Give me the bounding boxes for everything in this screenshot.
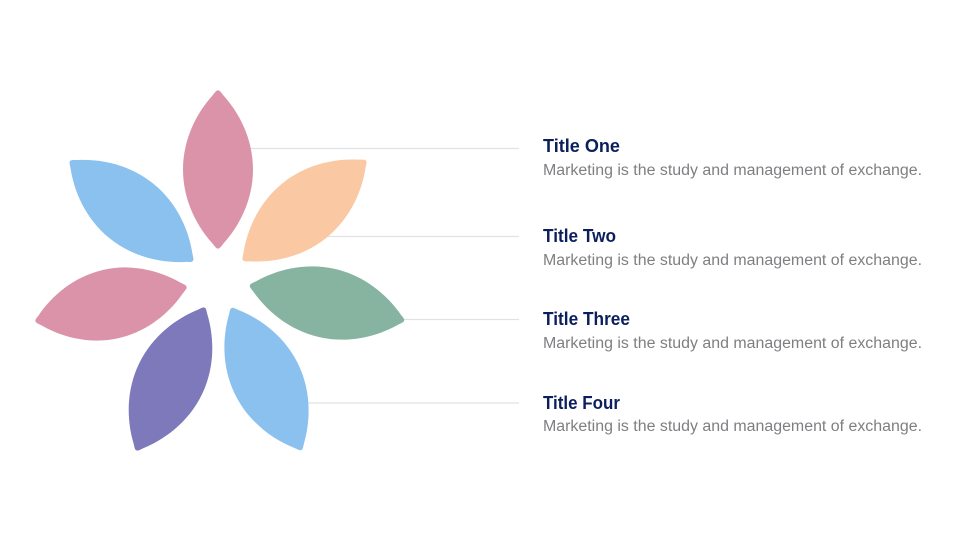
text block: Title Two: Marketing is the study and management of exchange. bbox=[543, 252, 922, 269]
flower diagram bbox=[28, 90, 412, 465]
petal: upper-right orange bbox=[221, 134, 388, 287]
petal: lower-right blue bbox=[200, 293, 333, 465]
text block: Title One: Title One bbox=[543, 135, 620, 156]
text block: Title Four: Title Four bbox=[543, 392, 620, 413]
petal: lower-left purple bbox=[105, 293, 236, 465]
text block: Title Four bbox=[543, 392, 922, 435]
text block: Title One bbox=[543, 135, 922, 179]
text block: Title Two bbox=[543, 225, 922, 269]
text block: Title Three: Marketing is the study and management of exchange. bbox=[543, 335, 922, 352]
text block: Title Three: Title Three bbox=[543, 308, 630, 329]
petal: top pink bbox=[183, 90, 253, 249]
petal: upper-left blue bbox=[48, 134, 215, 288]
text block: Title One: Marketing is the study and management of exchange. bbox=[543, 162, 922, 179]
petal: left pink bbox=[28, 253, 194, 355]
text block: Title Two: Title Two bbox=[543, 225, 616, 246]
text block: Title Three bbox=[543, 308, 922, 352]
petal: right green bbox=[242, 251, 412, 355]
text block: Title Four: Marketing is the study and management of exchange. bbox=[543, 418, 922, 435]
